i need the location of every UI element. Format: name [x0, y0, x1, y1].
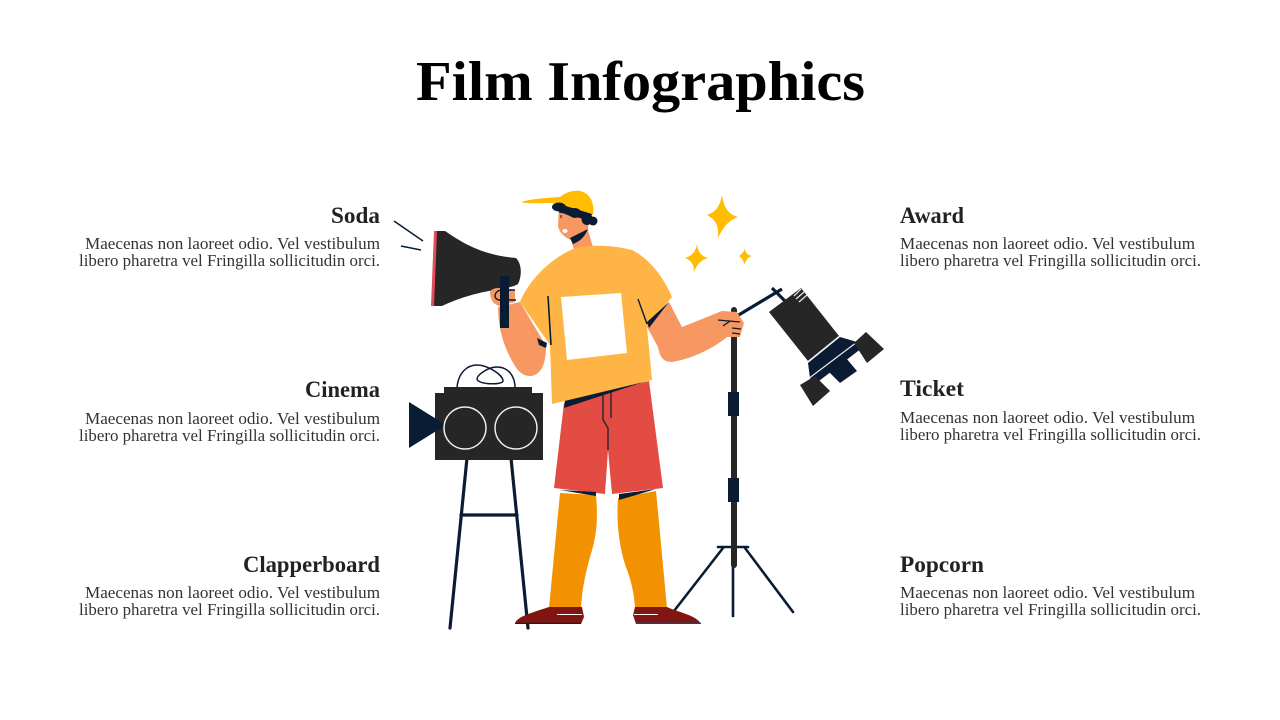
megaphone horn [432, 231, 521, 306]
panel: ticket [900, 376, 1201, 444]
text block: popcorn [900, 583, 1201, 619]
illustration: filmmaker [431, 191, 744, 624]
panel: cinema [79, 377, 380, 445]
text block: cinema: libero pharetra vel Fringilla sollicitudin orci. [79, 426, 380, 445]
boom arm [722, 288, 785, 325]
text block: cinema [79, 409, 380, 445]
lamp lower flap [800, 376, 830, 406]
sleeve folds [548, 296, 647, 345]
left arm [498, 302, 546, 376]
camera stand [450, 458, 528, 628]
text block: cinema: Maecenas non laoreet odio. Vel vestibulum [85, 409, 380, 428]
right arm [647, 302, 744, 362]
heading: award: Award [900, 203, 964, 228]
text block: popcorn: libero pharetra vel Fringilla sollicitudin orci. [900, 600, 1201, 619]
eye [559, 212, 564, 218]
text block: award [900, 234, 1201, 270]
chin shadow [570, 229, 588, 244]
icon: light stand [674, 288, 884, 616]
pole clamps [728, 392, 739, 502]
text block: ticket: Maecenas non laoreet odio. Vel vestibulum [900, 408, 1195, 427]
text block: soda: Maecenas non laoreet odio. Vel vestibulum [85, 234, 380, 253]
film reels [444, 407, 537, 449]
text block: clapperboard: Maecenas non laoreet odio. Vel vestibulum [85, 583, 380, 602]
text block: soda [79, 234, 380, 270]
icon: film camera on stand [409, 365, 543, 628]
icon: sparkles [685, 195, 752, 272]
lamp vents [794, 289, 807, 302]
panel: clapperboard [79, 552, 380, 619]
megaphone handle [500, 276, 509, 328]
text block: soda: libero pharetra vel Fringilla sollicitudin orci. [79, 251, 380, 270]
panel: soda [79, 203, 380, 270]
hair [552, 202, 598, 226]
neck and face [558, 208, 593, 256]
pole [731, 307, 737, 568]
icon: sound lines [394, 221, 423, 250]
shorts shadow [560, 380, 656, 500]
camera lens cone [409, 402, 446, 448]
finger lines [495, 290, 516, 300]
heading: ticket: Ticket [900, 376, 964, 401]
tripod legs [674, 547, 793, 616]
title: Film Infographics [416, 51, 865, 113]
text block: clapperboard [79, 583, 380, 619]
heading: clapperboard: Clapperboard [243, 552, 380, 577]
lamp barn door navy [808, 337, 862, 384]
shoe details [515, 614, 701, 623]
lamp upper flap [854, 332, 884, 363]
text block: ticket: libero pharetra vel Fringilla sollicitudin orci. [900, 425, 1201, 444]
shoes [515, 607, 701, 624]
panel: award [900, 203, 1201, 270]
heading: cinema: Cinema [305, 377, 380, 402]
text block: award: Maecenas non laoreet odio. Vel vestibulum [900, 234, 1195, 253]
hand on pole [718, 320, 741, 334]
sleeve shadows [537, 302, 669, 348]
megaphone rim [431, 231, 437, 306]
lamp highlight lines [808, 336, 857, 378]
cap [521, 191, 593, 215]
text block: award: libero pharetra vel Fringilla sollicitudin orci. [900, 251, 1201, 270]
legs [549, 491, 667, 608]
camera body [435, 387, 543, 460]
t-shirt panel [561, 293, 627, 360]
shorts [554, 381, 663, 494]
shorts drawstrings [603, 392, 611, 450]
mouth [562, 229, 568, 233]
t-shirt [520, 246, 672, 404]
text block: popcorn: Maecenas non laoreet odio. Vel vestibulum [900, 583, 1195, 602]
heading: popcorn: Popcorn [900, 552, 984, 577]
panel: popcorn [900, 552, 1201, 619]
lamp housing [769, 288, 839, 361]
camera cable loop [457, 365, 515, 391]
hand [490, 288, 515, 306]
lamp front block [829, 358, 857, 383]
text block: ticket [900, 408, 1201, 444]
text block: clapperboard: libero pharetra vel Fringilla sollicitudin orci. [79, 600, 380, 619]
heading: soda: Soda [331, 203, 380, 228]
